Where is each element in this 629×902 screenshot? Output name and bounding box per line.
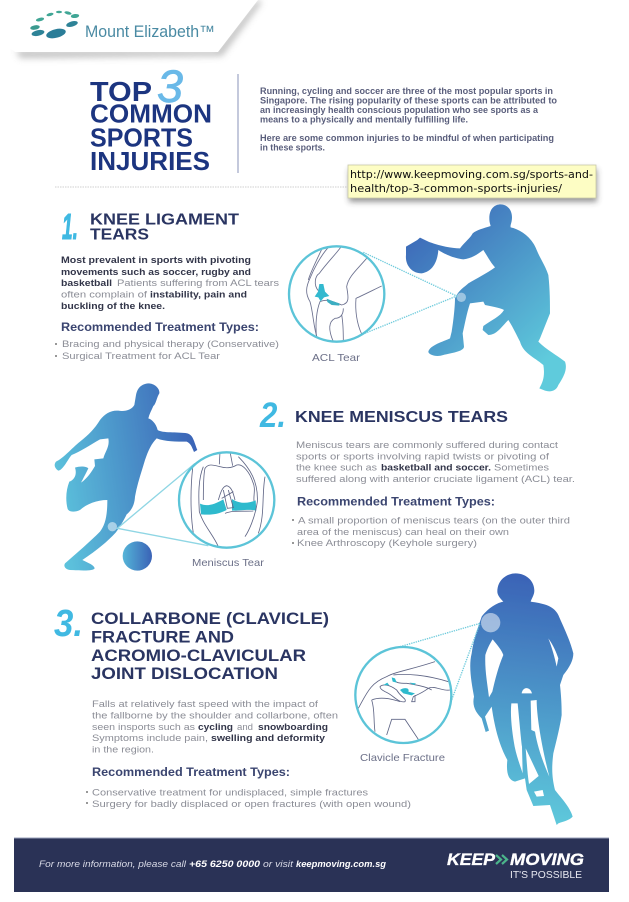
footer contact text (39, 859, 386, 870)
intro paragraph: in these sports. (260, 142, 325, 152)
description: buckling of the knee. (61, 301, 165, 312)
number 3: 3. (54, 603, 83, 645)
treatment list: Surgical Treatment for ACL Tear (62, 351, 220, 362)
number 2: 2. (259, 396, 286, 435)
intro paragraph: Singapore. The rising popularity of these sports can be attributed to (260, 96, 558, 106)
knee meniscus detail circle (179, 452, 274, 548)
description: basketball (61, 278, 112, 289)
heading: TEARS (90, 226, 149, 244)
intro paragraph: Running, cycling and soccer are three of the most popular sports in (260, 86, 553, 96)
Keep Moving logo: IT'S POSSIBLE (510, 869, 582, 881)
description: cycling (198, 722, 233, 733)
heading: COLLARBONE (CLAVICLE) (91, 610, 329, 628)
description: suffered along with anterior cruciate ligament (ACL) tear. (296, 474, 575, 485)
description: Sometimes (494, 462, 549, 474)
description: Patients suffering from ACL tears (117, 278, 279, 289)
heading: JOINT DISLOCATION (91, 665, 278, 683)
title: COMMON (90, 98, 212, 128)
icon: Mount Elizabeth logo mark (30, 11, 79, 40)
number 1: 1. (62, 206, 78, 247)
basketball player illustration (289, 204, 566, 391)
description (296, 440, 575, 485)
section 2: knee meniscus tears (55, 383, 575, 571)
soccer player illustration (55, 383, 208, 571)
intro paragraph: Here are some common injuries to be mindful of when participating (260, 133, 554, 143)
Keep Moving logo: KEEP (447, 850, 496, 869)
logo wordmark: Mount Elizabeth™ (85, 23, 215, 41)
title: INJURIES (90, 146, 210, 176)
treatment list: Bracing and physical therapy (Conservative) (62, 339, 279, 350)
description: snowboarding (258, 722, 328, 733)
footer contact text: For more information, please call (39, 859, 187, 870)
description: sports or sports involving rapid twists or pivoting of (296, 452, 549, 462)
heading (91, 610, 329, 683)
title: TOP (90, 76, 152, 107)
heading: FRACTURE AND (91, 628, 234, 646)
URL tooltip: http://www.keepmoving.com.sg/sports-and- (350, 168, 593, 181)
soccer ball (123, 541, 152, 571)
section 1: knee ligament tears (55, 204, 566, 391)
URL tooltip (348, 165, 597, 202)
footer band (14, 838, 609, 892)
footer contact text: +65 6250 0000 (189, 859, 261, 870)
intro paragraph (260, 86, 558, 152)
description: in the region. (92, 744, 154, 756)
treatment list (292, 516, 570, 549)
heading: KNEE LIGAMENT (90, 212, 239, 228)
clavicle caption: Clavicle Fracture (360, 752, 445, 764)
ACL caption: ACL Tear (312, 352, 361, 364)
silhouette: cyclist (470, 573, 573, 825)
treatment list: area of the meniscus) can heal on their own (297, 527, 509, 538)
treatment heading: Recommended Treatment Types: (92, 767, 290, 779)
treatment list: Conservative treatment for undisplaced, simple fractures (92, 788, 368, 798)
title: 3 (157, 61, 183, 112)
description: movements such as soccer, rugby and (61, 267, 251, 278)
description: the fallborne by the shoulder and collarbone, often (92, 710, 338, 722)
description (92, 699, 338, 756)
description: Most prevalent in sports with pivoting (61, 255, 251, 266)
icon: green chevrons (496, 855, 507, 864)
intro paragraph: an increasingly health conscious population who see sports as a (260, 105, 538, 115)
treatment list: Surgery for badly displaced or open fractures (with open wound) (92, 799, 411, 810)
callout lines (400, 623, 480, 700)
treatment list: Knee Arthroscopy (Keyhole surgery) (297, 538, 477, 549)
description: Falls at relatively fast speed with the impact of (92, 699, 318, 710)
description: Meniscus tears are commonly suffered during contact (296, 440, 558, 451)
treatment list (55, 339, 279, 362)
callout lines (117, 463, 208, 546)
description: and (237, 722, 253, 733)
treatment list (86, 788, 411, 810)
heading: KNEE MENISCUS TEARS (295, 409, 508, 426)
callout lines (363, 252, 457, 334)
description: swelling and deformity (211, 733, 326, 744)
description: the knee such as (296, 462, 377, 474)
heading: ACROMIO-CLAVICULAR (91, 647, 306, 665)
title (90, 61, 212, 176)
knee ACL detail circle (289, 246, 384, 342)
description: seen insports such as (92, 722, 195, 733)
Keep Moving logo (447, 850, 584, 881)
meniscus caption: Meniscus Tear (192, 557, 265, 569)
description (61, 255, 279, 312)
description: basketball and soccer. (381, 462, 491, 474)
treatment heading: Recommended Treatment Types: (61, 322, 259, 334)
footer contact text: keepmoving.com.sg (296, 859, 386, 870)
title: SPORTS (90, 122, 193, 152)
cyclist illustration (400, 573, 573, 825)
heading (90, 212, 239, 244)
description: often complain of (61, 290, 147, 300)
silhouette: soccer player (55, 383, 197, 570)
description: instability, pain and (150, 290, 247, 300)
treatment heading: Recommended Treatment Types: (297, 496, 495, 508)
Keep Moving logo: MOVING (510, 850, 584, 869)
shoulder detail circle (355, 647, 451, 743)
header logo plate (0, 0, 262, 58)
footer contact text: or visit (263, 859, 293, 870)
intro paragraph: means to a physically and mentally fulfilling life. (260, 114, 468, 124)
description: Symptoms include pain, (92, 733, 208, 744)
silhouette: basketball player (406, 204, 566, 391)
treatment list: A small proportion of meniscus tears (on the outer third (298, 516, 570, 526)
URL tooltip: health/top-3-common-sports-injuries/ (350, 182, 562, 195)
section 3: collarbone fracture (54, 573, 573, 825)
